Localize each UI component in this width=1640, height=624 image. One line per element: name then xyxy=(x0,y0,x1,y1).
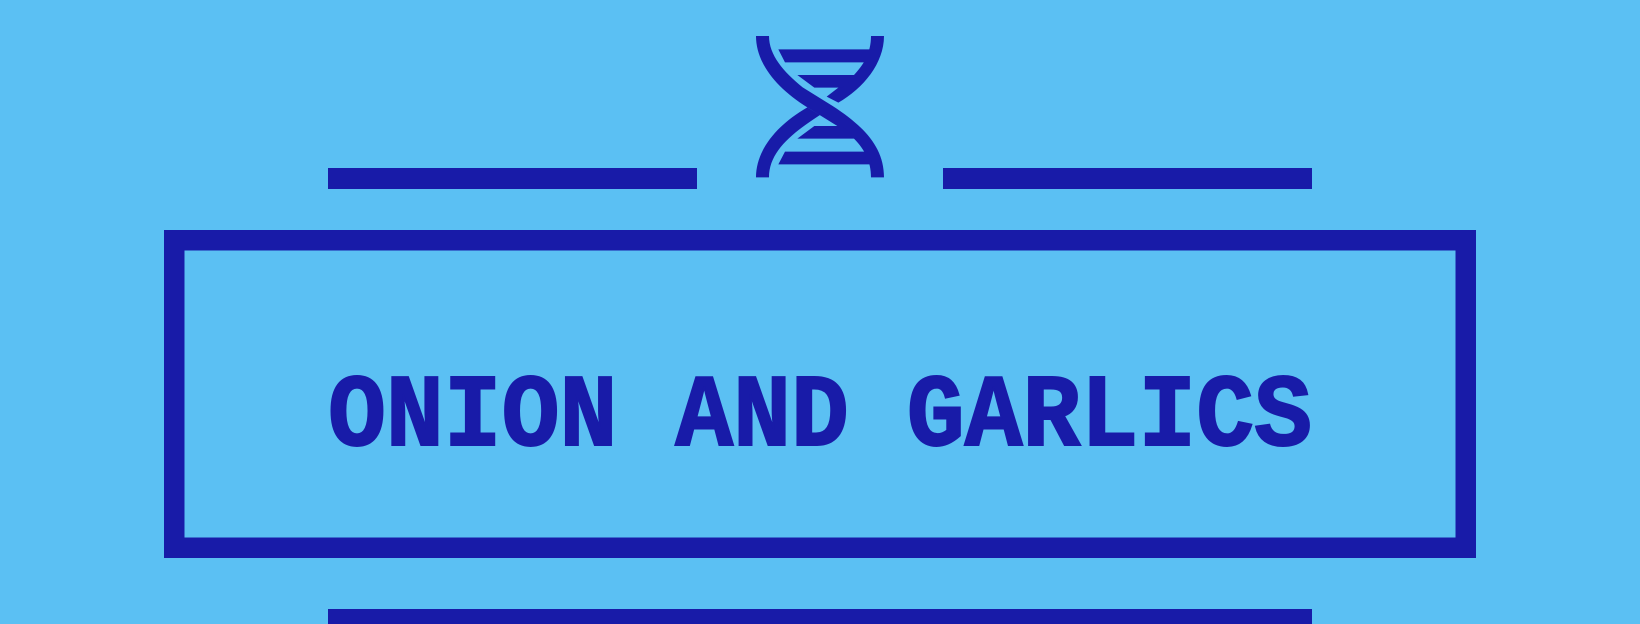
title frame xyxy=(174,240,1466,548)
top left rule xyxy=(328,168,697,189)
title: ONION AND GARLICS xyxy=(328,360,1312,477)
bottom rule xyxy=(328,609,1312,624)
icon: DNA helix xyxy=(756,36,884,177)
top right rule xyxy=(943,168,1312,189)
